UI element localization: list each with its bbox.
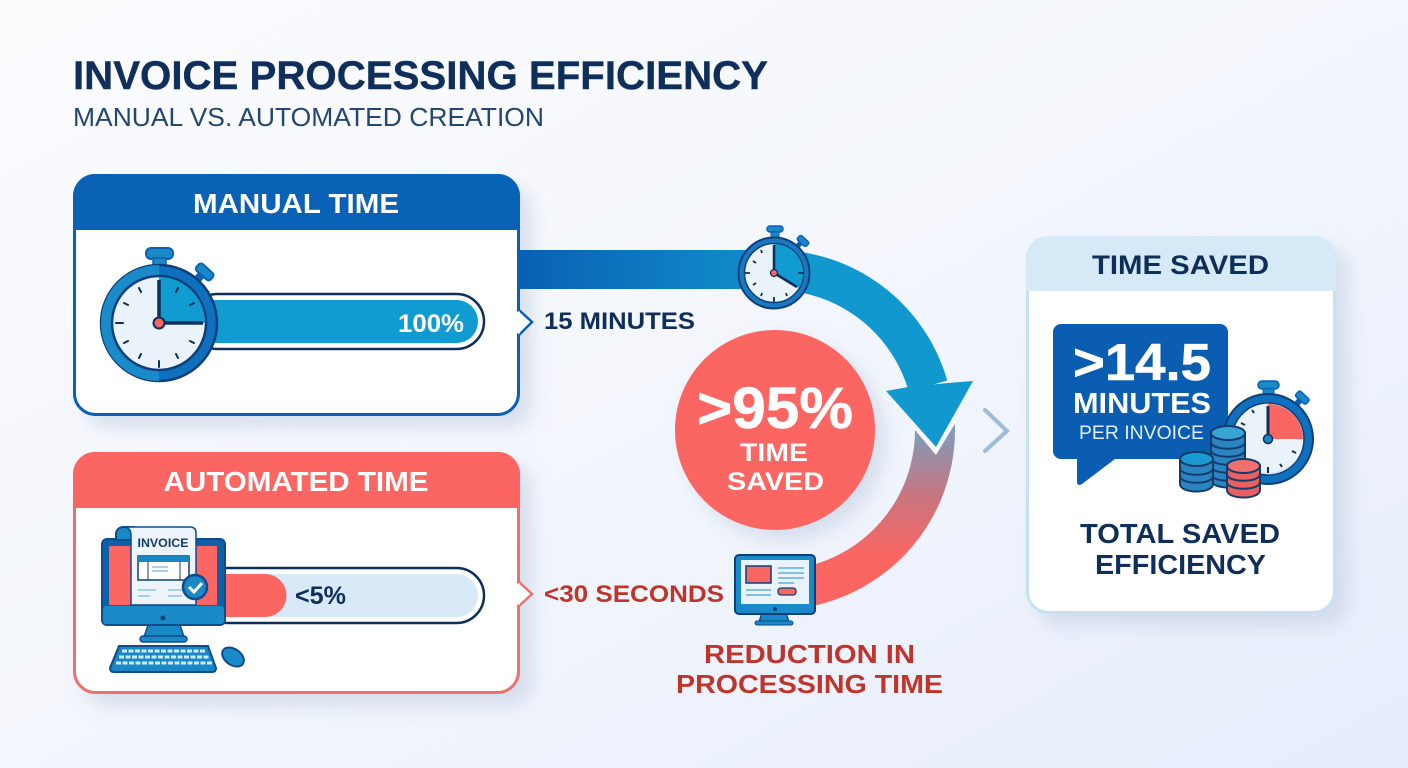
- panel header: [1026, 236, 1336, 291]
- saved label: SAVED: [727, 468, 824, 496]
- minutes label: MINUTES: [1073, 388, 1211, 420]
- title: INVOICE PROCESSING EFFICIENCY: [73, 54, 768, 98]
- icon: small stopwatch: [738, 226, 810, 308]
- circle: 95 percent time saved: [675, 330, 885, 540]
- panel shadow: [1038, 248, 1348, 626]
- bar value: <5%: [295, 582, 346, 610]
- chevron arrow: [985, 410, 1007, 451]
- bar value: 100%: [398, 310, 464, 338]
- icon: small monitor: [735, 555, 815, 625]
- icon: computer with invoice: INVOICE: [138, 538, 189, 550]
- notch opening: [516, 312, 520, 334]
- arrow head gap: [905, 405, 960, 455]
- blue horizontal bar: [520, 250, 778, 289]
- pointer notch: [519, 310, 532, 335]
- speech bubble: [1053, 324, 1228, 485]
- big number: >14.5: [1073, 334, 1211, 392]
- total saved line two: EFFICIENCY: [1095, 549, 1266, 580]
- caption line two: PROCESSING TIME: [676, 669, 943, 699]
- circle shadow: [685, 340, 885, 540]
- caption: reduction in processing time: [676, 639, 943, 699]
- panel heading: AUTOMATED TIME: [164, 466, 428, 497]
- panel shadow: [85, 464, 532, 706]
- total saved line one: TOTAL SAVED: [1080, 518, 1280, 549]
- panel body: [74, 176, 518, 414]
- panel: automated time: [73, 452, 532, 706]
- panel heading: MANUAL TIME: [193, 188, 399, 219]
- icon: stopwatch: [101, 248, 217, 381]
- panel body: [1028, 238, 1334, 612]
- circle fill: [675, 330, 875, 530]
- label: 15 minutes: 15 MINUTES: [544, 308, 695, 335]
- flow arrow: blue bar and curve: [520, 250, 928, 386]
- panel heading: TIME SAVED: [1092, 250, 1269, 280]
- flow arrow: red curve: [806, 415, 935, 587]
- progress bar: [190, 294, 484, 349]
- panel: time saved: [1026, 236, 1348, 626]
- notch opening: [516, 584, 520, 604]
- panel body: [74, 454, 518, 692]
- icon: stopwatch with coins: [1180, 381, 1313, 498]
- pointer notch: [519, 582, 532, 606]
- icon: computer with invoice: [102, 527, 247, 672]
- panel header: [73, 452, 520, 508]
- time label: TIME: [740, 439, 808, 467]
- progress bar: [200, 568, 484, 623]
- coin stack: left: [1180, 452, 1213, 492]
- coin stack: middle: [1211, 426, 1245, 488]
- panel shadow: [85, 186, 532, 428]
- panel header: [73, 174, 520, 230]
- arrow head: [886, 381, 973, 455]
- blue curve: [775, 270, 928, 386]
- arrow head fill: [886, 381, 973, 447]
- subtitle: MANUAL VS. AUTOMATED CREATION: [73, 102, 544, 132]
- big number: >95%: [697, 376, 853, 441]
- per invoice label: PER INVOICE: [1079, 423, 1204, 444]
- coin stack: red: [1227, 459, 1260, 498]
- panel: manual time: [73, 174, 532, 428]
- label: under 30 seconds: <30 SECONDS: [544, 581, 724, 608]
- caption line one: REDUCTION IN: [704, 639, 915, 669]
